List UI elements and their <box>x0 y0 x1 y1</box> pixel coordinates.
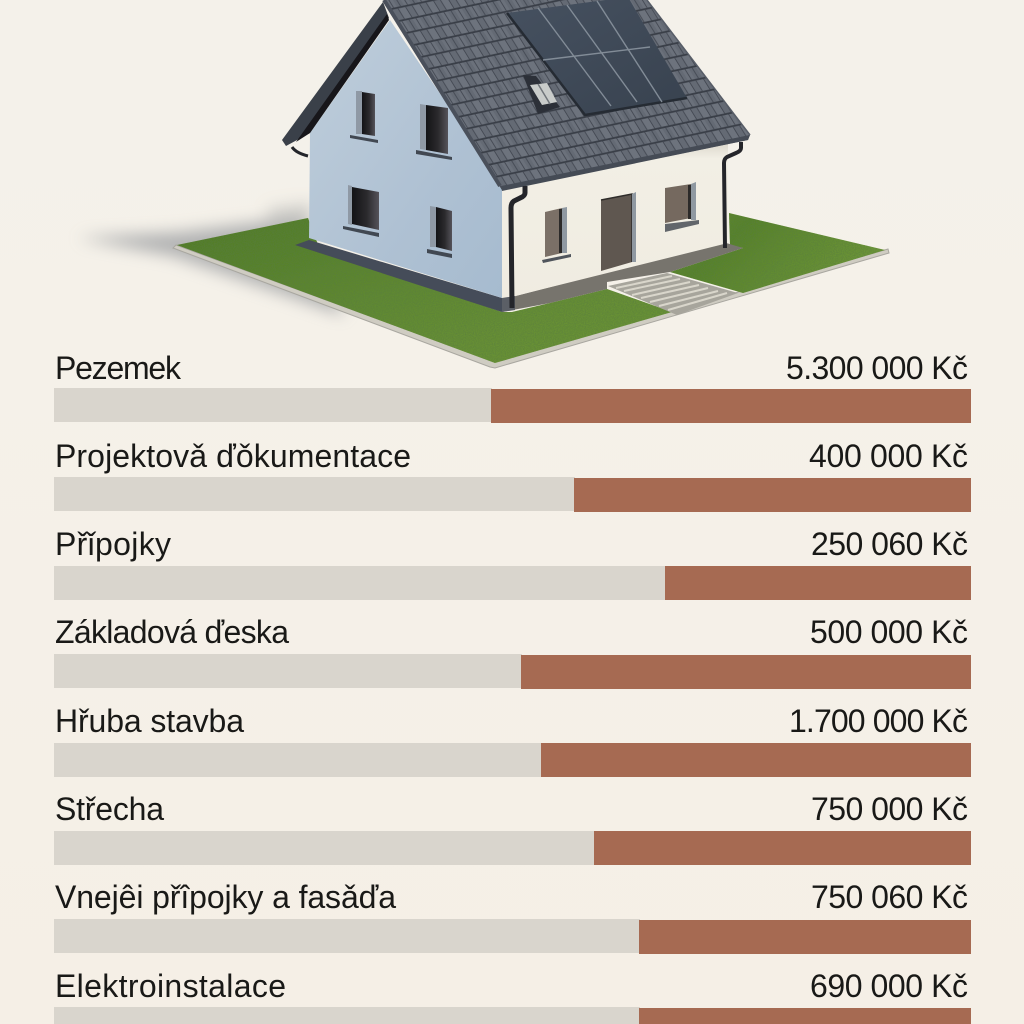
row: Projektová dokumentace <box>54 438 971 512</box>
cast shadow <box>77 202 345 316</box>
row: Projektová dokumentace: 400 000 Kč <box>809 438 968 474</box>
row: Vnější přípojky a fasáda: 750 060 Kč <box>811 879 968 915</box>
row: Vnější přípojky a fasáda <box>54 879 971 954</box>
side windows <box>343 91 452 258</box>
row: Přípojky <box>54 526 971 600</box>
row: Střecha: Střecha <box>55 791 164 827</box>
row: Pezemek: 5.300 000 Kč <box>786 350 968 386</box>
row: Elektroinstalace <box>54 968 971 1024</box>
row: Střecha: 750 000 Kč <box>811 791 968 827</box>
row: Základová deska: Základová ďeska <box>55 614 289 650</box>
row: Elektroinstalace: Elektroinstalace <box>55 968 286 1004</box>
row: Přípojky: 250 060 Kč <box>811 526 968 562</box>
front wall <box>502 143 728 300</box>
front windows and door <box>542 182 699 271</box>
solar panel <box>507 0 687 115</box>
row: Pezemek <box>54 350 971 423</box>
row: Hrubá stavba: 1.700 000 Kč <box>789 703 968 739</box>
plinth <box>295 240 502 312</box>
lawn plot <box>173 213 889 368</box>
downpipes <box>511 142 741 308</box>
row: Přípojky: Přǐpojky <box>55 526 171 562</box>
side wall <box>309 20 502 298</box>
row: Projektová dokumentace: Projektovǎ ďǒkumentace <box>55 438 411 474</box>
garden path <box>608 273 738 315</box>
front plinth <box>502 296 515 312</box>
row: Pezemek: Pezemek <box>55 350 182 386</box>
row: Střecha <box>54 791 971 865</box>
row: Vnější přípojky a fasáda: Vnejêi přîpojky a fasǎďa <box>55 879 396 915</box>
illustration: house with solar panels on lawn <box>77 0 889 368</box>
skylight <box>523 75 560 114</box>
row: Hrubá stavba <box>54 703 971 777</box>
concrete apron <box>502 242 743 312</box>
gable fascia <box>282 2 389 156</box>
roof <box>384 0 750 191</box>
row: Základová deska: 500 000 Kč <box>810 614 968 650</box>
row: Hrubá stavba: Hřuba stavba <box>55 703 244 739</box>
row: Elektroinstalace: 690 000 Kč <box>810 968 968 1004</box>
row: Základová deska <box>54 614 971 689</box>
